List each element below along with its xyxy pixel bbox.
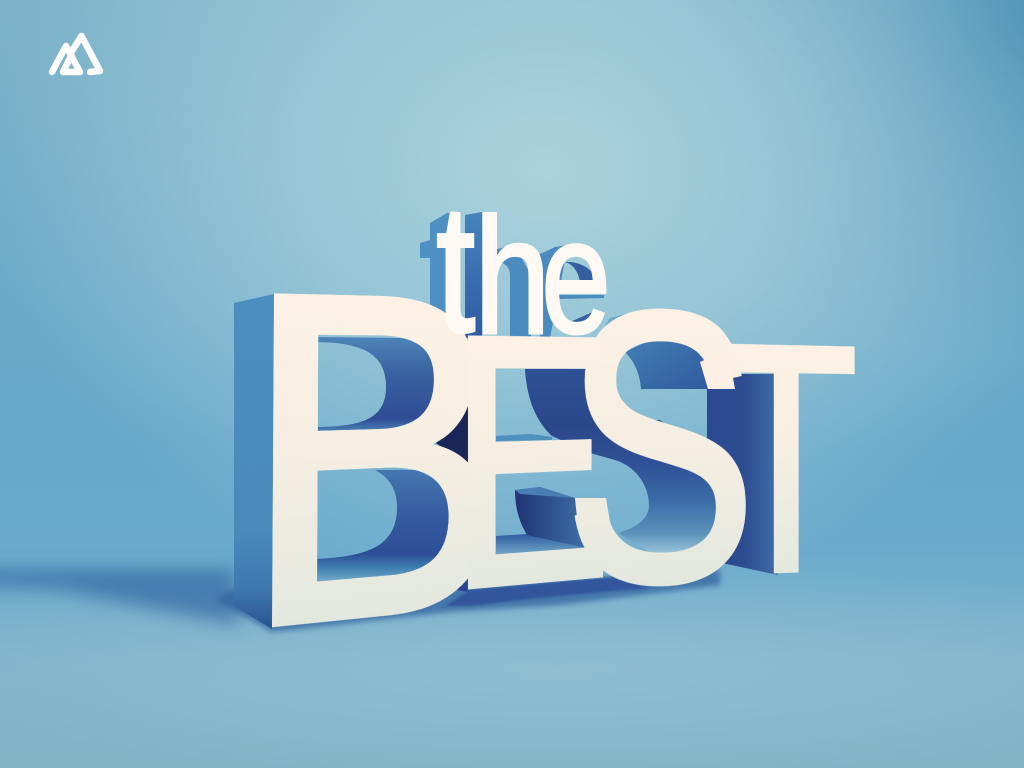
extrusion: B — [234, 294, 470, 629]
letter e: e — [541, 185, 611, 367]
letter S: S — [563, 227, 756, 667]
letter T: T — [711, 273, 859, 645]
extrusion: the — [420, 211, 636, 340]
letter E: E — [449, 259, 611, 666]
letter B: B — [238, 192, 505, 731]
letter E — [449, 281, 684, 645]
letter t: t — [436, 166, 475, 370]
extrusion: E and S — [445, 335, 732, 606]
letter B — [238, 221, 619, 703]
letter h: h — [474, 184, 551, 368]
ground shadow — [0, 568, 720, 632]
letter S — [563, 250, 846, 644]
letter T — [711, 293, 947, 626]
extrusion: T stem — [690, 374, 778, 575]
